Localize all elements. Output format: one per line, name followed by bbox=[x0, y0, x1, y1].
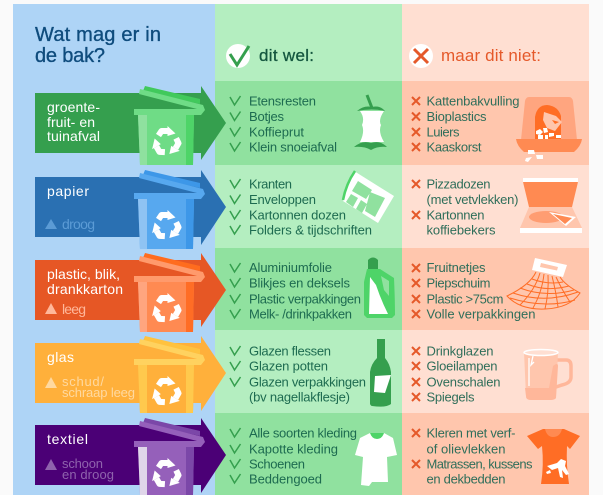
row 1: groente-, fruit- en tuinafval arrow and bin bbox=[35, 86, 226, 165]
note: schud/schraap leeg bbox=[45, 374, 135, 400]
label: groente- fruit- en tuinafval: tuinafval bbox=[47, 128, 100, 144]
row 3: plastic, blik, drankkarton arrow and bin bbox=[35, 253, 226, 332]
title bbox=[35, 24, 161, 67]
note: schud/schraap leeg: schraap leeg bbox=[62, 385, 135, 400]
list: textiel niet bbox=[412, 426, 533, 486]
list: plastic wel bbox=[230, 260, 361, 322]
list: groente wel: Koffieprut bbox=[249, 124, 304, 140]
arrow: papier bbox=[35, 170, 226, 245]
list: textiel niet: Matrassen, kussens bbox=[426, 456, 533, 472]
list: papier wel: Kartonnen dozen bbox=[249, 208, 346, 222]
icon: fruit net bbox=[507, 258, 580, 309]
note: droog bbox=[45, 216, 95, 232]
panel: maar dit niet column bbox=[402, 4, 589, 495]
icon: detergent bottle bbox=[364, 258, 395, 318]
icon: stained orange t-shirt bbox=[527, 429, 580, 484]
row 5: textiel arrow and bin bbox=[35, 418, 226, 495]
list: glas niet: Gloeilampen bbox=[426, 358, 498, 374]
list: groente wel: Botjes bbox=[249, 109, 284, 124]
note: schoon en droog: en droog bbox=[62, 467, 114, 482]
icon: purple bin bbox=[134, 418, 205, 495]
label: groente- fruit- en tuinafval: fruit- en bbox=[47, 114, 95, 130]
icon: green bin bbox=[134, 86, 205, 165]
list: glas wel: Glazen potten bbox=[249, 358, 328, 374]
list: textiel wel: Schoenen bbox=[249, 456, 305, 472]
list: groente niet: Luiers bbox=[426, 124, 460, 140]
list: papier wel: Folders & tijdschriften bbox=[249, 222, 372, 238]
list: plastic niet: Plastic >75cm bbox=[426, 292, 504, 306]
list: papier niet: Pizzadozen bbox=[426, 176, 490, 192]
icon: orange bin bbox=[134, 253, 205, 332]
icon: broken mug bbox=[524, 350, 571, 400]
list: plastic niet: Volle verpakkingen bbox=[426, 306, 536, 322]
list: textiel niet: of olievlekken bbox=[426, 442, 506, 456]
note: schoon en droog bbox=[45, 456, 114, 482]
label: groente- fruit- en tuinafval: groente- bbox=[47, 99, 100, 115]
list: papier wel: Kranten bbox=[249, 176, 292, 192]
list: groente wel bbox=[230, 94, 337, 154]
label: textiel: textiel bbox=[47, 431, 88, 447]
arrow: plastic bbox=[35, 253, 226, 327]
heading: dit wel bbox=[226, 44, 314, 68]
icon: blue bin bbox=[134, 170, 205, 249]
icon: wine bottle bbox=[370, 339, 391, 407]
note: schud/schraap leeg: schud/ bbox=[62, 374, 104, 389]
list: groente niet: Kaaskorst bbox=[426, 140, 482, 154]
list: plastic wel: Aluminiumfolie bbox=[249, 260, 332, 275]
list: papier wel: Enveloppen bbox=[249, 192, 316, 207]
note: leeg bbox=[45, 301, 86, 317]
list: glas niet bbox=[412, 344, 500, 404]
panel: dit wel column bbox=[215, 4, 402, 495]
list: groente wel: Etensresten bbox=[249, 94, 316, 108]
row 2: papier arrow and bin bbox=[35, 170, 226, 249]
list: plastic niet bbox=[412, 260, 536, 322]
note: schoon en droog: schoon bbox=[62, 456, 103, 471]
list: groente niet: Bioplastics bbox=[426, 109, 487, 124]
arrow: groen bbox=[35, 86, 226, 160]
heading: maar dit niet: maar dit niet: bbox=[441, 46, 541, 65]
list: textiel wel: Beddengoed bbox=[249, 472, 322, 486]
title: de bak? bbox=[35, 45, 105, 67]
icon: apple core bbox=[354, 95, 387, 150]
list: glas niet: Drinkglazen bbox=[426, 344, 494, 358]
arrow: glas bbox=[35, 336, 226, 411]
row 4: glas arrow and bin bbox=[35, 336, 226, 413]
arrow: textiel bbox=[35, 418, 226, 493]
list: textiel wel: Alle soorten kleding bbox=[249, 426, 357, 440]
note: droog: droog bbox=[62, 216, 95, 232]
list: textiel niet: en dekbedden bbox=[426, 472, 506, 486]
list: plastic wel: Blikjes en deksels bbox=[249, 276, 350, 290]
label: plastic, blik, drankkarton: plastic, blik, bbox=[47, 266, 120, 282]
icon: yellow bin bbox=[134, 336, 205, 413]
icon: cat litter tray bbox=[516, 97, 582, 162]
label: groente- fruit- en tuinafval bbox=[47, 99, 100, 144]
list: groente niet bbox=[412, 94, 520, 154]
list: glas niet: Spiegels bbox=[426, 390, 475, 404]
list: textiel niet: Kleren met verf- bbox=[426, 426, 516, 440]
list: glas wel: Glazen flessen bbox=[249, 344, 331, 358]
label: plastic, blik, drankkarton: drankkarton bbox=[47, 281, 123, 297]
list: papier wel bbox=[230, 176, 372, 238]
panel: left column background bbox=[13, 4, 215, 495]
list: glas wel: Glazen verpakkingen bbox=[249, 374, 366, 390]
list: plastic niet: Fruitnetjes bbox=[426, 260, 486, 275]
list: groente wel: Klein snoeiafval bbox=[249, 140, 337, 154]
icon: white t-shirt bbox=[355, 433, 397, 486]
icon: newspaper bbox=[343, 171, 394, 223]
list: groente niet: Kattenbakvulling bbox=[426, 94, 520, 108]
list: textiel wel: Kapotte kleding bbox=[249, 442, 338, 456]
list: plastic wel: Melk- /drinkpakken bbox=[249, 306, 352, 322]
list: glas wel: (bv nagellakflesje) bbox=[249, 390, 350, 404]
label: plastic, blik, drankkarton bbox=[47, 266, 123, 297]
list: papier niet: (met vetvlekken) bbox=[426, 192, 518, 207]
heading: dit wel: dit wel: bbox=[259, 46, 314, 65]
list: papier niet bbox=[412, 176, 518, 238]
list: plastic wel: Plastic verpakkingen bbox=[249, 292, 361, 306]
icon: pizza box bbox=[520, 178, 582, 233]
list: glas wel bbox=[230, 344, 366, 404]
label: glas: glas bbox=[47, 349, 74, 365]
title: Wat mag er in bbox=[35, 24, 161, 46]
heading: maar dit niet bbox=[409, 44, 541, 68]
list: plastic niet: Piepschuim bbox=[426, 276, 490, 290]
label: papier: papier bbox=[47, 183, 89, 199]
list: papier niet: Kartonnen bbox=[426, 208, 484, 222]
list: glas niet: Ovenschalen bbox=[426, 374, 500, 390]
list: papier niet: koffiebekers bbox=[426, 222, 496, 238]
list: textiel wel bbox=[230, 426, 357, 486]
note: leeg: leeg bbox=[62, 301, 86, 317]
